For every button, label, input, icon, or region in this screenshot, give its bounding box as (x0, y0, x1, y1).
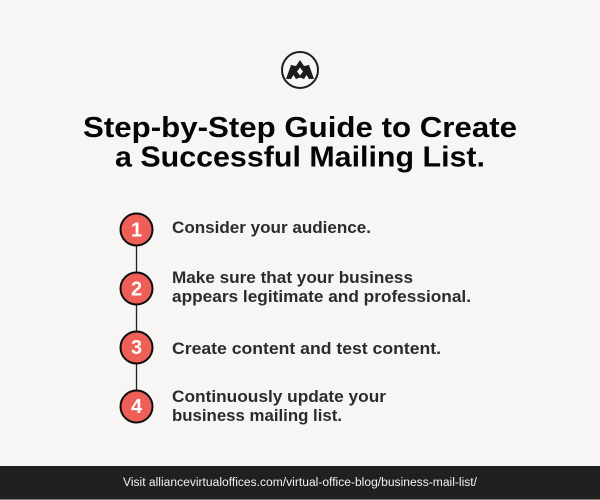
step 2 text: appears legitimate and professional. (172, 288, 471, 306)
step 2 text: Make sure that your business (172, 269, 413, 287)
step 3 text: Create content and test content. (172, 340, 441, 358)
timeline connector (136, 230, 138, 405)
step 4 text (172, 388, 387, 425)
step 4 (120, 388, 387, 425)
step 1 text: Consider your audience. (172, 219, 371, 237)
step 1 (120, 214, 371, 246)
title: a Successful Mailing List. (115, 142, 485, 174)
footer link text: Visit alliancevirtualoffices.com/virtual-office-blog/business-mail-list/ (123, 477, 478, 489)
step 4 text: Continuously update your (172, 388, 387, 406)
step 3 badge (120, 332, 152, 364)
icon: logo (282, 52, 318, 88)
step 2 badge: 2 (131, 278, 142, 300)
step 4 badge (120, 390, 152, 422)
step 3 badge: 3 (131, 337, 142, 359)
step 2 badge (120, 272, 152, 304)
step 2 (120, 269, 471, 306)
step 1 badge (120, 214, 152, 246)
title (83, 112, 517, 174)
footer bar (0, 466, 600, 500)
title: Step-by-Step Guide to Create (83, 112, 517, 144)
step 1 badge: 1 (131, 220, 142, 242)
step 4 badge: 4 (131, 396, 143, 418)
step 2 text (172, 269, 471, 306)
step 3 (120, 332, 441, 364)
step 4 text: business mailing list. (172, 407, 342, 425)
